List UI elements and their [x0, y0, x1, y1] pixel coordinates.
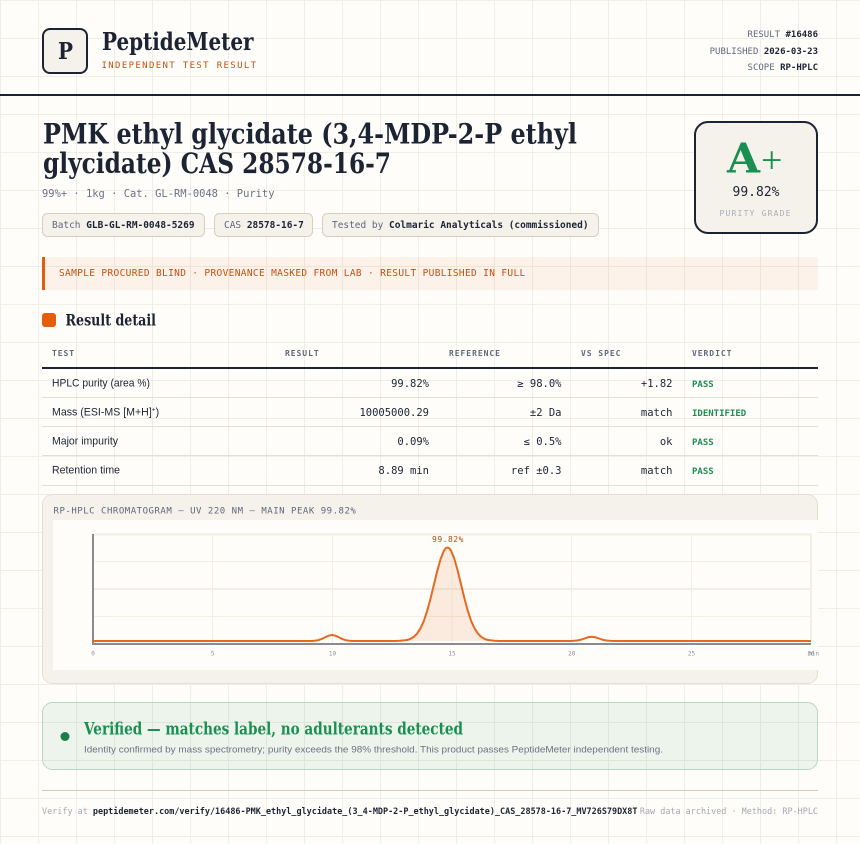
table header: VS SPEC [581, 349, 621, 358]
table header: TEST [52, 349, 75, 358]
tagline: INDEPENDENT TEST RESULT [102, 61, 257, 71]
notice banner [42, 257, 818, 290]
row: retention time: match [641, 465, 672, 477]
notice banner: SAMPLE PROCURED BLIND · PROVENANCE MASKED FROM LAB · RESULT PUBLISHED IN FULL [59, 268, 526, 279]
x axis labels: 0 [91, 651, 95, 658]
row: major impurity: 0.09% [397, 436, 430, 448]
row: retention time: Retention time [52, 464, 120, 476]
brand name: PeptideMeter [102, 27, 254, 56]
table header: RESULT [285, 349, 320, 358]
title [43, 116, 577, 180]
chromatogram chart [53, 520, 819, 670]
x axis labels: 20 [568, 651, 576, 658]
chromatogram panel [42, 494, 819, 684]
title: glycidate) CAS 28578-16-7 [43, 146, 391, 180]
section heading [42, 310, 156, 329]
table header: REFERENCE [449, 349, 501, 358]
row: major impurity [52, 435, 714, 448]
row: major impurity: PASS [692, 438, 714, 448]
x axis labels: min [808, 651, 819, 658]
row: retention time: 8.89 min [378, 465, 429, 477]
row: HPLC purity: ≥ 98.0% [517, 378, 562, 390]
grade card [695, 122, 817, 233]
result metadata: PUBLISHED 2026-03-23 [710, 47, 818, 57]
row: HPLC purity: HPLC purity (area %) [52, 377, 150, 389]
x axis labels: 10 [329, 651, 336, 658]
row: retention time: ref ±0.3 [511, 465, 562, 477]
chart title: RP-HPLC CHROMATOGRAM — UV 220 NM — MAIN PEAK 99.82% [54, 506, 356, 516]
peak label: 99.82% [432, 535, 464, 544]
verdict description: Identity confirmed by mass spectrometry; purity exceeds the 98% threshold. This product passes PeptideMeter independent testing. [84, 744, 663, 755]
grade letter: + [761, 139, 782, 181]
row: HPLC purity: +1.82 [641, 378, 672, 390]
main peak fill [400, 548, 495, 641]
x axis labels: 25 [688, 651, 695, 658]
section heading: Result detail [66, 310, 156, 329]
row: major impurity: ok [660, 436, 673, 448]
footer [42, 790, 818, 816]
row: mass: + [152, 406, 156, 413]
metadata pills [42, 214, 598, 236]
row: mass: IDENTIFIED [692, 409, 747, 419]
verification link: Verify at peptidemeter.com/verify/16486-PMK_ethyl_glycidate_(3_4-MDP-2-P_ethyl_glycidate)_CAS_28578-16-7_MV726S79DX8T [42, 806, 637, 816]
result metadata: SCOPE RP-HPLC [748, 63, 818, 73]
row: HPLC purity: PASS [692, 380, 714, 390]
row: HPLC purity [52, 377, 714, 390]
result metadata: RESULT #16486 [748, 30, 818, 40]
purity value: 99.82% [733, 185, 780, 200]
row: HPLC purity: 99.82% [391, 378, 430, 390]
grade caption: PURITY GRADE [720, 209, 792, 218]
pill: batch: Batch GLB-GL-RM-0048-5269 [52, 220, 195, 231]
icon: logo: P [58, 38, 73, 65]
icon: status dot [60, 732, 70, 741]
pill: CAS [214, 214, 312, 236]
row: mass: 10005000.29 [359, 407, 429, 419]
row: major impurity: ≤ 0.5% [524, 436, 562, 448]
x axis labels: 15 [448, 651, 456, 658]
title: PMK ethyl glycidate (3,4-MDP-2-P ethyl [43, 116, 577, 150]
results table [42, 349, 818, 486]
product subtitle: 99%+ · 1kg · Cat. GL-RM-0048 · Purity [42, 188, 275, 200]
row: mass: ±2 Da [530, 407, 562, 419]
axes [93, 534, 811, 644]
row: retention time: PASS [692, 467, 714, 477]
table header: VERDICT [692, 349, 732, 358]
row: retention time [52, 464, 714, 477]
pill: tested by: Tested by Colmaric Analyticals (commissioned) [332, 220, 589, 231]
grade letter: A [726, 134, 761, 182]
pill: CAS: CAS 28578-16-7 [224, 220, 304, 231]
x axis labels: 30 [807, 651, 815, 658]
method note: Raw data archived · Method: RP-HPLC [640, 806, 818, 816]
row: major impurity: Major impurity [52, 435, 118, 447]
row: mass [52, 406, 747, 419]
row: mass: Mass (ESI-MS [M+H] [52, 406, 152, 418]
result metadata [710, 30, 818, 73]
header [43, 27, 818, 73]
row: mass: match [641, 407, 672, 419]
verdict callout [42, 702, 818, 770]
icon: logo [43, 29, 87, 73]
grade letter [726, 134, 782, 182]
pill: tested by [322, 214, 598, 236]
x axis labels [91, 651, 819, 658]
table header [52, 349, 732, 358]
x axis labels: 5 [211, 651, 215, 658]
pill: batch [42, 214, 204, 236]
trace line [93, 548, 811, 641]
verdict heading: Verified — matches label, no adulterants detected [83, 719, 463, 738]
row: mass: ) [156, 406, 159, 418]
